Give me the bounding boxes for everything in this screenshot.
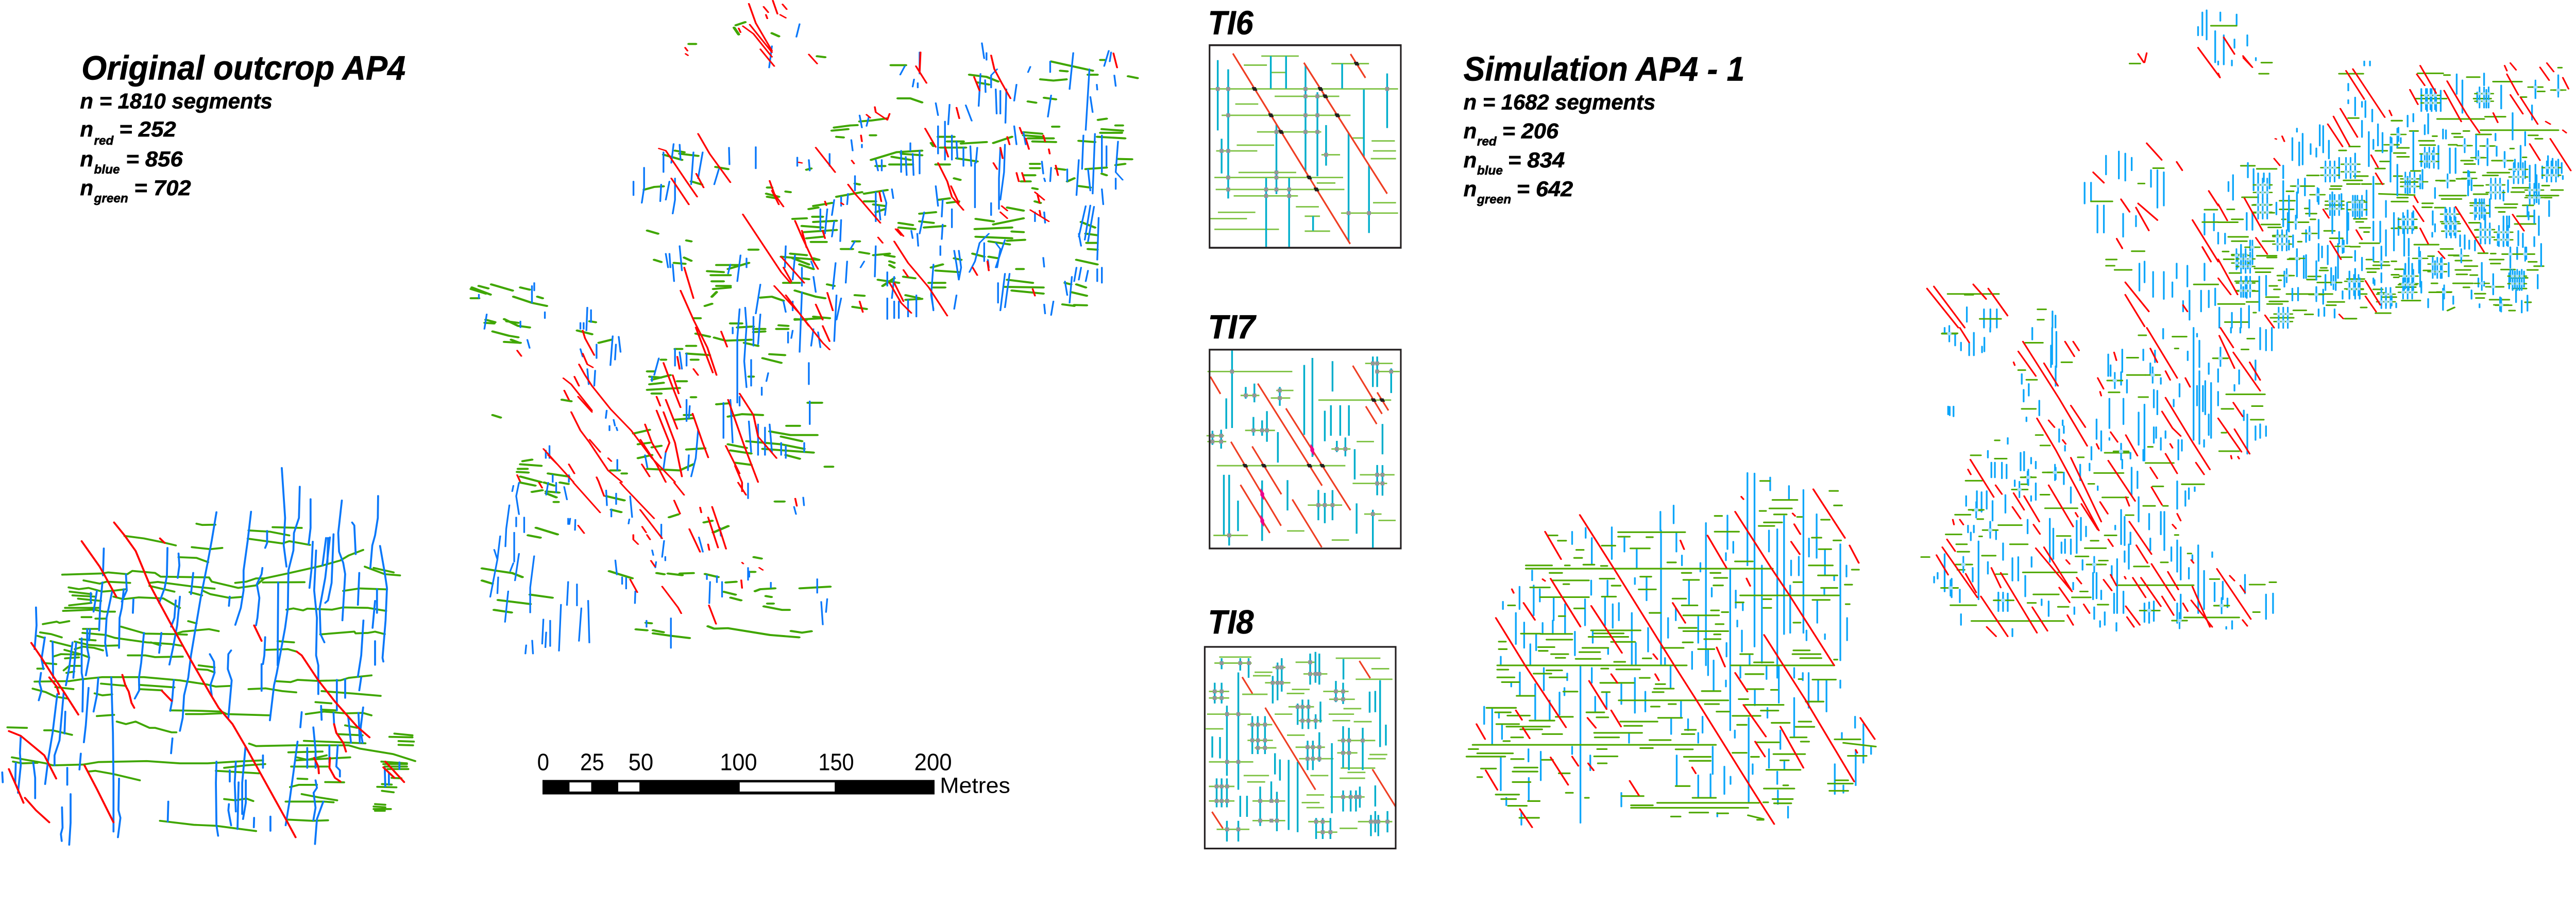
text: n blue: blue: [1477, 164, 1503, 178]
blue lines: [1218, 56, 1387, 247]
text: n blue: n: [1464, 148, 1477, 172]
heading block: simulation statistics: [1464, 50, 1744, 207]
label: TI7: TI7: [1208, 309, 1257, 346]
map region: lower left lobes: [1921, 326, 2276, 637]
green fracture set: [1467, 481, 1876, 820]
blue fractures: [2218, 58, 2563, 328]
red lines: [1233, 54, 1387, 244]
green fracture set: [471, 22, 1138, 482]
red fractures: [1927, 38, 2251, 328]
scale bar: [537, 749, 1010, 798]
frame: [1205, 647, 1396, 849]
green fractures: [1921, 333, 2276, 621]
scale bar: black bar: [543, 780, 935, 794]
blue fractures: [1934, 328, 2273, 637]
red fracture set: [517, 1, 1117, 482]
scale bar: white segments: [569, 782, 835, 792]
blue fracture set: [1484, 473, 1871, 825]
title: Simulation AP4 - 1: Simulation AP4 - 1: [1464, 50, 1744, 88]
blue lines: [1212, 652, 1387, 842]
green fractures: [2218, 63, 2563, 322]
scale bar: unit label: Metres: [940, 774, 1010, 798]
scale bar: tick labels: 0: [537, 749, 549, 776]
text: n green: [1464, 177, 1573, 207]
map region: upper left islands: [1927, 10, 2251, 415]
panel: simulation detail map: [1467, 473, 1876, 827]
text: n blue: blue: [94, 163, 120, 177]
frame: [1210, 350, 1401, 549]
panel: original outcrop detail map: [2, 468, 415, 845]
intersection markers: grey: [1216, 89, 1389, 213]
green lines: [1206, 657, 1393, 832]
scale bar: tick labels: [537, 749, 952, 776]
blue fracture set: [490, 483, 827, 654]
text: n blue: n: [80, 147, 93, 171]
text: n red: n: [80, 117, 93, 141]
red fracture set: [9, 522, 404, 837]
panel: TI6 training image: [1210, 45, 1401, 248]
red lines: [1210, 366, 1388, 547]
text: n red: red: [1477, 135, 1497, 149]
intersection markers: magenta: [1260, 444, 1314, 527]
red fractures: [2218, 58, 2571, 328]
blue lines: [1212, 351, 1391, 547]
text: n green: n: [80, 176, 93, 200]
scale bar: tick labels: 25: [580, 749, 604, 776]
panel: original outcrop full map, lower part: [482, 483, 830, 654]
intersection markers: black: [1242, 398, 1385, 468]
intersection markers: grey: [1211, 364, 1393, 536]
panel: simulation full map: [1921, 10, 2571, 637]
scale bar: tick labels: 150: [818, 749, 854, 776]
text: n blue: [1464, 148, 1565, 178]
text: n blue: [80, 147, 183, 177]
panel: original outcrop full map, upper part: [471, 1, 1138, 482]
green fractures: [1947, 26, 2236, 320]
text: n red: = 252: [119, 117, 176, 141]
blue fractures: [1950, 10, 2247, 415]
blue fracture set: [479, 24, 1123, 482]
scale bar: tick labels: 100: [720, 749, 757, 776]
text: n red: = 206: [1502, 119, 1559, 143]
scale bar: tick labels: 200: [914, 749, 952, 776]
cross clusters: [1942, 326, 2229, 628]
text: n green: green: [94, 192, 128, 205]
text: n green: green: [1477, 193, 1511, 207]
text: n red: red: [94, 134, 114, 148]
text: total segments: n = 1810 segments: [80, 89, 273, 113]
hash clusters: [2232, 80, 2566, 328]
heading block: original outcrop statistics: [80, 49, 405, 205]
green lines: [1207, 364, 1400, 540]
red fractures: [1937, 328, 2260, 637]
label: TI6: TI6: [1208, 4, 1254, 41]
text: total segments: n = 1682 segments: [1464, 90, 1655, 114]
red lines: [1212, 661, 1396, 829]
text: n red: n: [1464, 119, 1477, 143]
text: n red: [1464, 119, 1559, 149]
panel: TI8 training image: [1205, 647, 1396, 849]
intersection markers: grey: [1213, 662, 1389, 832]
blue fracture set: [2, 468, 399, 845]
frame: [1210, 45, 1401, 248]
panel: TI7 training image: [1207, 350, 1401, 549]
scale bar: tick labels: 50: [629, 749, 653, 776]
map region: upper right dense band: [2218, 58, 2571, 328]
text: n green: [80, 176, 191, 205]
label: TI8: TI8: [1208, 604, 1254, 641]
text: n blue: = 834: [1508, 148, 1565, 172]
red fracture set: [539, 483, 797, 624]
intersection markers: black: [1251, 62, 1360, 191]
red fracture set: [1477, 489, 1875, 827]
text: n green: = 642: [1517, 177, 1573, 201]
green lines: [1210, 56, 1398, 231]
green fracture set: [482, 483, 830, 638]
text: n red: [80, 117, 176, 148]
green fracture set: [8, 524, 415, 831]
text: n blue: = 856: [126, 147, 183, 171]
title: Original outcrop AP4: Original outcrop AP4: [81, 49, 405, 87]
text: n green: n: [1464, 177, 1477, 201]
text: n green: = 702: [134, 176, 191, 200]
